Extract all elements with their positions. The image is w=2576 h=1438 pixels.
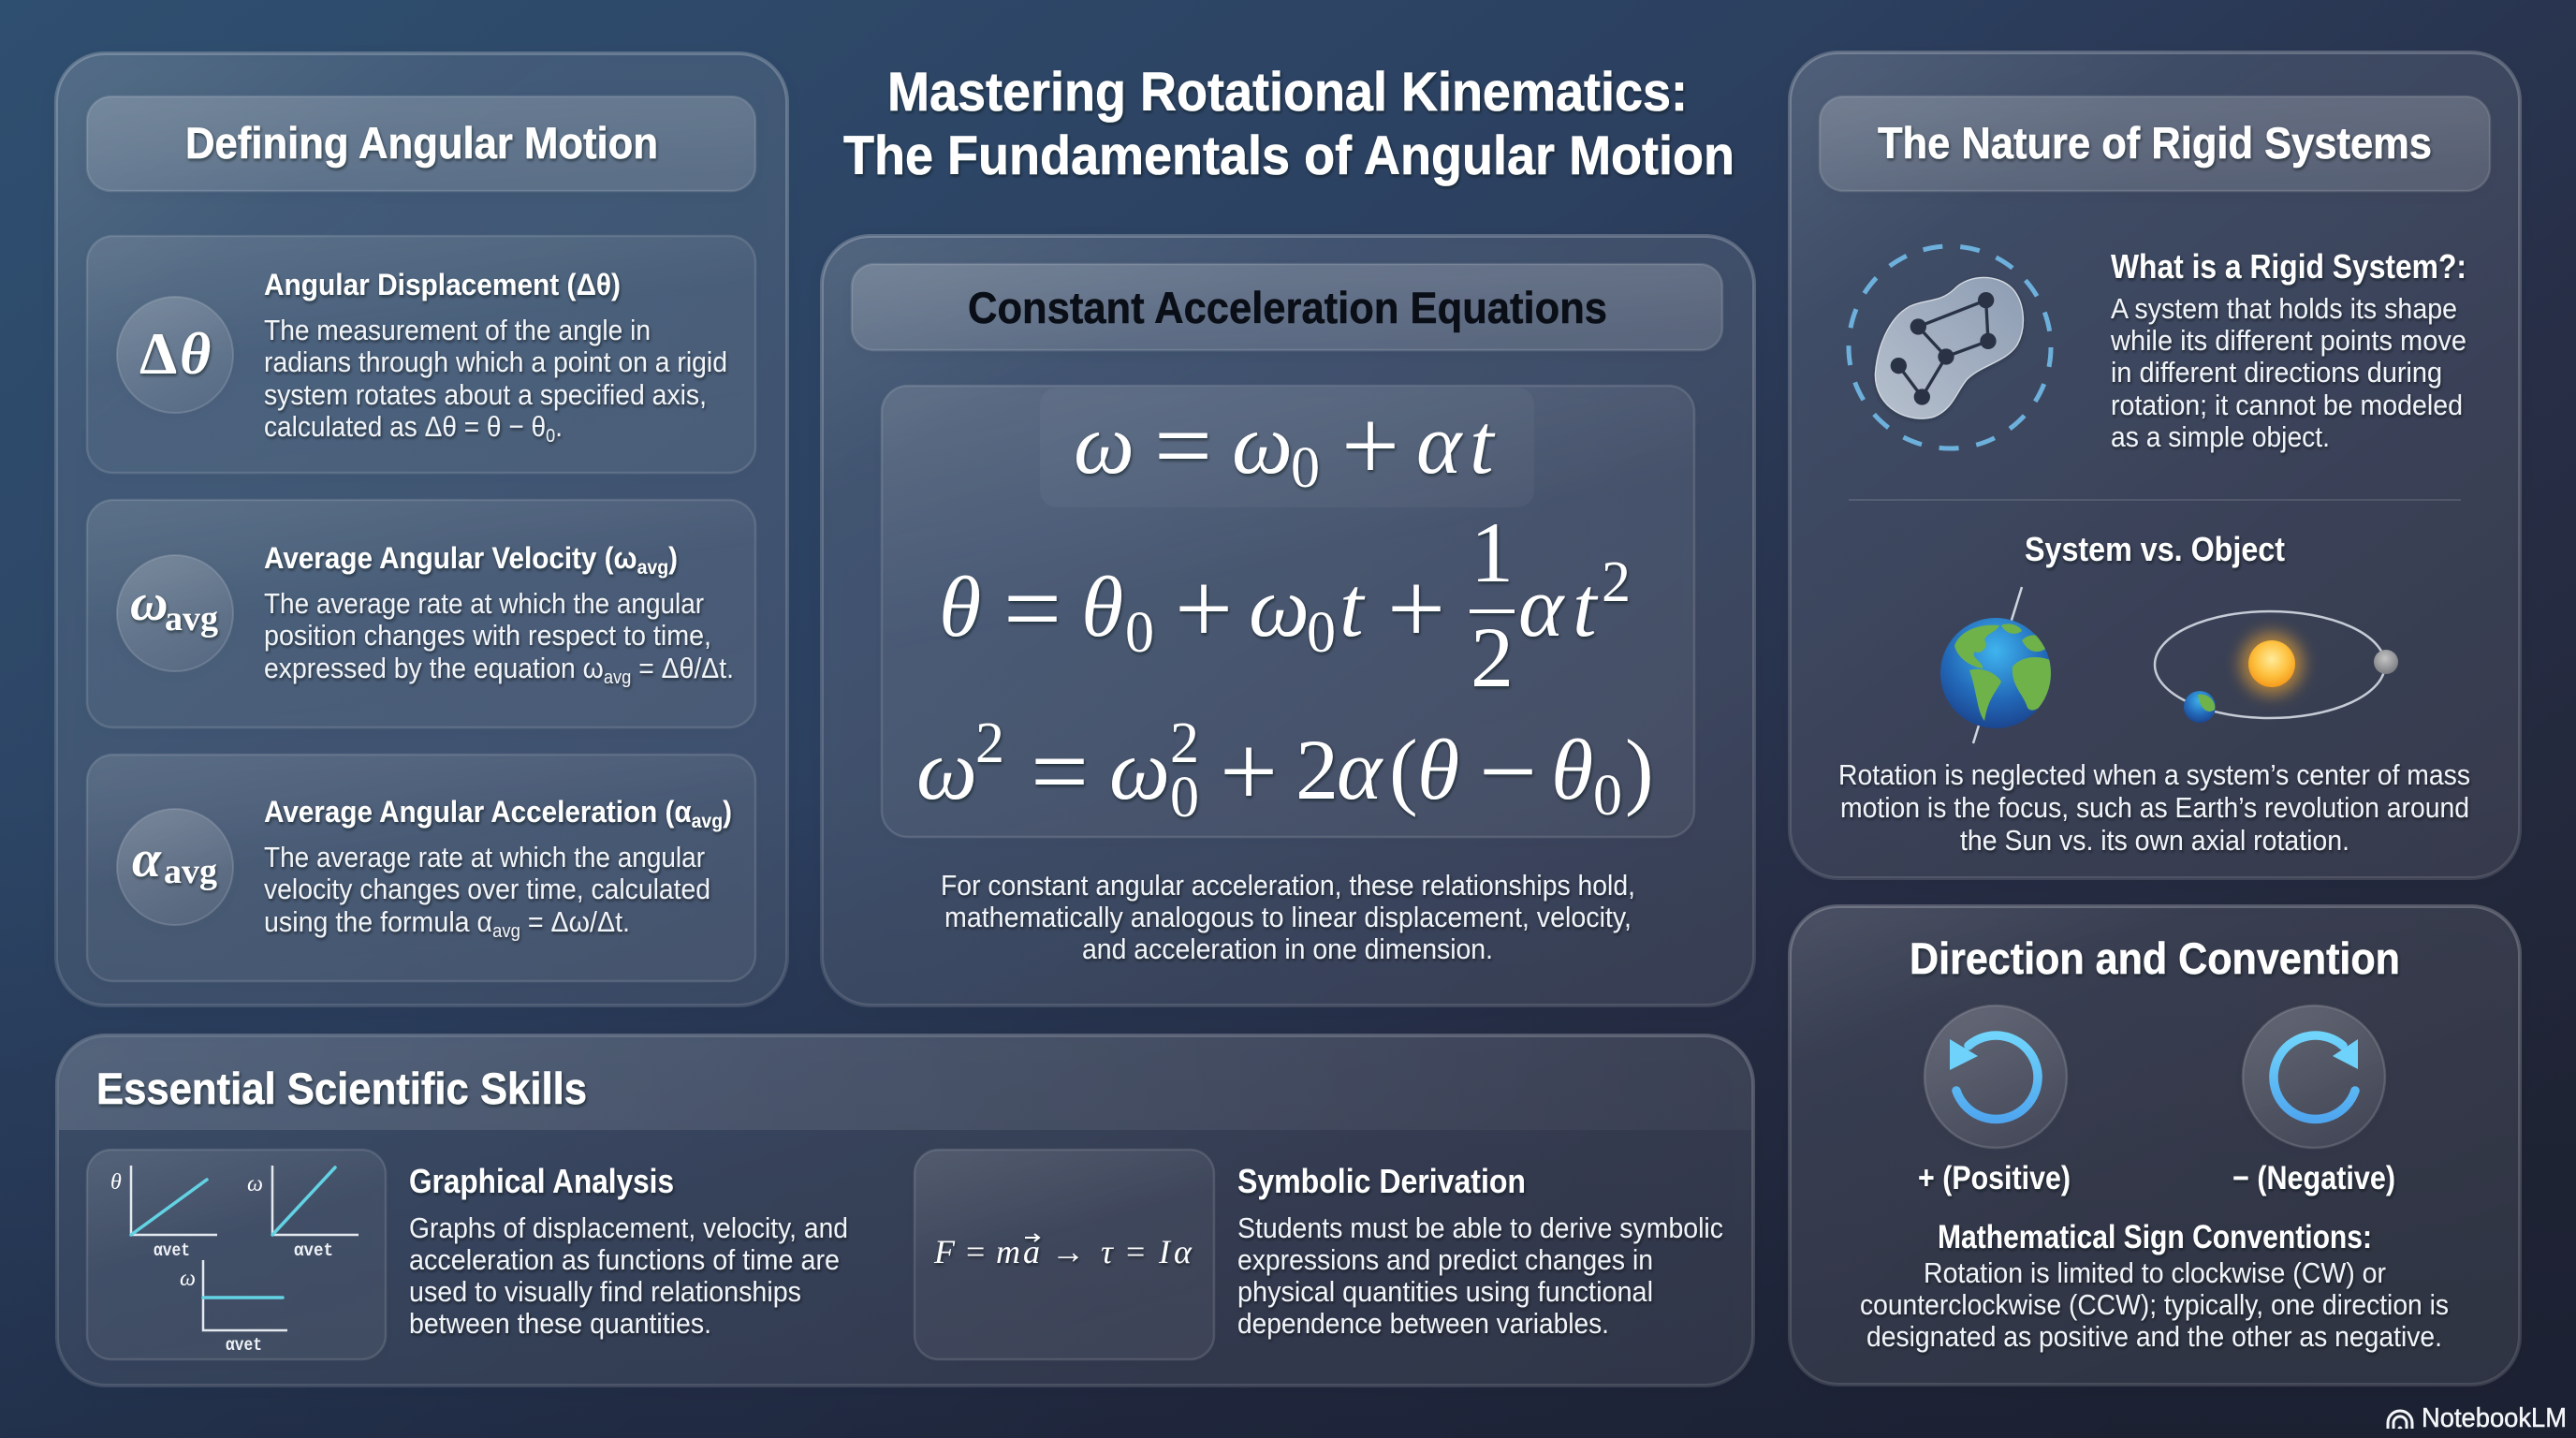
icon: omega avg — [117, 555, 233, 671]
icon: counterclockwise arrow — [1925, 1005, 2067, 1148]
heading: defining angular motion: Defining Angular Motion — [185, 118, 658, 168]
text: mathematical sign conventions: designated as positive and the other as negative. — [1866, 1320, 2442, 1353]
formula: force and torque: m — [996, 1233, 1020, 1270]
caption: system vs object: Rotation is neglected when a system’s center of mass — [1838, 758, 2470, 791]
title: Mastering Rotational Kinematics: — [887, 62, 1688, 123]
heading: defining angular motion — [87, 96, 755, 191]
panel: direction and convention — [1790, 906, 2520, 1385]
text: what is a rigid system: in different directions during — [2111, 356, 2442, 389]
text: angular displacement: system rotates about a specified axis, — [264, 378, 707, 411]
label: positive: + (Positive) — [1918, 1160, 2071, 1196]
icon: orbit with sun, earth and moon — [2155, 611, 2398, 723]
equation: angular velocity: + — [1341, 389, 1399, 503]
icon: delta theta: θ — [180, 320, 211, 387]
title: The Fundamentals of Angular Motion — [843, 125, 1734, 186]
caption: equations — [941, 869, 1635, 965]
label: negative: − (Negative) — [2232, 1160, 2395, 1196]
equation: velocity squared: = — [1031, 714, 1089, 829]
equation: angular position: 2 — [1471, 609, 1514, 705]
card: average angular velocity — [87, 500, 755, 727]
chart: theta vs time — [110, 1166, 217, 1261]
panel: nature of rigid systems — [1790, 52, 2520, 878]
text: mathematical sign conventions: Mathematical Sign Conventions: — [1938, 1219, 2372, 1255]
text: what is a rigid system: rotation; it cannot be modeled — [2111, 389, 2463, 421]
formula: force and torque: α — [1174, 1233, 1193, 1270]
icon: earth with axis — [1940, 587, 2054, 743]
subheading: system vs object: System vs. Object — [2025, 530, 2285, 568]
equation: velocity squared: ) — [1625, 722, 1654, 817]
panel: constant acceleration equations — [822, 236, 1754, 1005]
formula: force and torque: τ — [1101, 1233, 1114, 1270]
card: graphs — [87, 1150, 386, 1359]
icon: delta theta: Δ — [139, 320, 177, 387]
heading: direction and convention: Direction and Convention — [1910, 933, 2400, 983]
text: angular displacement: calculated as Δθ = θ − θ — [264, 410, 576, 443]
text: mathematical sign conventions: Rotation is limited to clockwise (CW) or — [1924, 1256, 2386, 1289]
logo: NotebookLM: NotebookLM — [2422, 1403, 2567, 1433]
icon: clockwise arrow — [2243, 1005, 2385, 1148]
text: average angular acceleration: The average rate at which the angular — [264, 841, 705, 873]
equation: angular position: + — [1175, 551, 1233, 666]
card: average angular acceleration — [87, 755, 755, 981]
text: angular displacement — [264, 268, 727, 447]
icon: delta theta — [117, 297, 233, 413]
equation: angular velocity: α — [1416, 396, 1463, 492]
equation: velocity squared: 0 — [1170, 766, 1199, 829]
equation: velocity squared: θ — [1417, 722, 1459, 817]
text: angular displacement: Angular Displacement (Δθ) — [264, 268, 621, 301]
icon: alpha avg: α — [132, 830, 162, 888]
text: symbolic derivation: Students must be able to derive symbolic — [1237, 1211, 1723, 1244]
equation: angular velocity — [1074, 389, 1496, 503]
text: average angular velocity: = Δθ/Δt. — [631, 652, 734, 684]
text: average angular velocity: The average rate at which the angular — [264, 587, 704, 620]
title — [843, 62, 1734, 186]
equation: angular velocity: = — [1154, 389, 1212, 503]
equation: angular position: θ — [939, 559, 981, 654]
formula: force and torque: → — [1051, 1233, 1085, 1270]
equation: velocity squared: 0 — [1593, 764, 1622, 828]
text: average angular acceleration: ) — [723, 795, 732, 829]
text: mathematical sign conventions: counterclockwise (CCW); typically, one direction is — [1860, 1288, 2449, 1321]
text: average angular velocity — [264, 541, 734, 688]
text: graphical analysis: Graphs of displacement, velocity, and — [409, 1211, 848, 1244]
text: average angular velocity: expressed by the equation ω — [264, 652, 635, 684]
text: average angular velocity: position changes with respect to time, — [264, 619, 711, 652]
text: average angular acceleration: Average Angular Acceleration (α — [264, 795, 725, 829]
caption: equations: and acceleration in one dimension. — [1082, 932, 1493, 965]
text: average angular acceleration — [264, 795, 732, 942]
equation: velocity squared — [916, 712, 1654, 829]
caption: system vs object: the Sun vs. its own axial rotation. — [1960, 824, 2349, 857]
equation box — [882, 386, 1694, 837]
equation: velocity squared: − — [1479, 714, 1537, 829]
formula: force and torque: I — [1158, 1233, 1172, 1270]
chart: alpha vs time: ω — [180, 1267, 196, 1291]
text: average angular acceleration: avg — [492, 921, 520, 942]
text: mathematical sign conventions — [1860, 1219, 2449, 1353]
equation: velocity squared: α — [1337, 722, 1383, 817]
heading: essential scientific skills: Essential Scientific Skills — [96, 1064, 587, 1113]
chart: omega vs time: αvet — [294, 1240, 333, 1261]
equation: angular position: t — [1339, 559, 1366, 654]
panel: essential scientific skills — [57, 1035, 1753, 1386]
panel: defining angular motion — [56, 53, 787, 1005]
text: symbolic derivation: dependence between variables. — [1237, 1307, 1609, 1340]
equation: angular position: 0 — [1125, 601, 1154, 665]
text: what is a rigid system: What is a Rigid System?: — [2111, 247, 2466, 286]
equation: angular position: 2 — [1602, 550, 1631, 614]
equation: angular position: θ — [1081, 559, 1123, 654]
chart: omega vs time: ω — [247, 1172, 263, 1196]
icon: rigid system — [1849, 246, 2051, 448]
formula: force and torque: = — [966, 1233, 985, 1270]
chart: theta vs time: θ — [110, 1170, 122, 1195]
chart: theta vs time: αvet — [154, 1240, 190, 1261]
icon: omega avg: avg — [165, 599, 218, 638]
text: what is a rigid system — [2110, 247, 2466, 453]
text: average angular velocity: ) — [668, 541, 678, 575]
text: average angular velocity: avg — [637, 557, 668, 579]
text: average angular acceleration: avg — [692, 811, 723, 832]
heading: constant acceleration equations — [852, 264, 1722, 350]
caption: system vs object — [1838, 758, 2470, 857]
equation: velocity squared: θ — [1551, 722, 1593, 817]
text: average angular velocity: Average Angular Velocity (ω — [264, 541, 666, 575]
chart: alpha vs time: αvet — [226, 1335, 262, 1356]
equation: angular position: ω — [1249, 559, 1310, 654]
icon: alpha avg — [117, 809, 233, 925]
text: symbolic derivation: Symbolic Derivation — [1237, 1162, 1526, 1200]
text: average angular velocity: avg — [604, 668, 631, 688]
card: angular displacement — [87, 236, 755, 473]
equation: angular position: α — [1518, 559, 1565, 654]
equation: angular position: = — [1003, 551, 1061, 666]
text: symbolic derivation: expressions and predict changes in — [1237, 1243, 1653, 1276]
equation: velocity squared: ( — [1389, 722, 1418, 817]
text: angular displacement: The measurement of the angle in — [264, 314, 651, 346]
text: average angular acceleration: = Δω/Δt. — [520, 905, 630, 938]
equation: angular position — [939, 505, 1631, 705]
text: graphical analysis: used to visually find relationships — [409, 1275, 801, 1308]
chart: omega vs time — [247, 1166, 359, 1261]
equation: angular position: t — [1573, 559, 1599, 654]
icon: omega avg: ω — [130, 574, 168, 632]
equation: velocity squared: ω — [1109, 722, 1170, 817]
heading: nature of rigid systems — [1820, 96, 2490, 191]
equation: velocity squared: ω — [916, 722, 977, 817]
text: symbolic derivation — [1237, 1162, 1723, 1340]
text: what is a rigid system: while its different points move — [2110, 324, 2466, 357]
text: graphical analysis — [409, 1162, 848, 1340]
equation: velocity squared: 2 — [1295, 722, 1339, 817]
caption: equations: mathematically analogous to linear displacement, velocity, — [944, 901, 1632, 933]
text: graphical analysis: between these quantities. — [409, 1307, 711, 1340]
equation: velocity squared: 2 — [1170, 712, 1199, 775]
equation: angular velocity: t — [1470, 396, 1496, 492]
text: average angular acceleration: velocity changes over time, calculated — [264, 873, 710, 905]
text: graphical analysis: Graphical Analysis — [409, 1162, 674, 1200]
text: symbolic derivation: physical quantities using functional — [1237, 1275, 1653, 1308]
equation: angular velocity: ω — [1232, 396, 1293, 492]
equation: velocity squared: + — [1220, 714, 1278, 829]
formula: force and torque — [933, 1233, 1193, 1270]
equation: velocity squared: 2 — [975, 712, 1004, 775]
equation: angular velocity: ω — [1074, 396, 1134, 492]
equation: angular position: 1 — [1471, 505, 1514, 600]
formula: force and torque: = — [1126, 1233, 1145, 1270]
text: angular displacement: radians through which a point on a rigid — [264, 345, 727, 378]
icon: alpha avg: avg — [164, 852, 217, 891]
heading: nature of rigid systems: The Nature of Rigid Systems — [1878, 118, 2432, 168]
text: average angular acceleration: using the formula α — [264, 905, 511, 938]
text: what is a rigid system: as a simple object. — [2111, 420, 2330, 453]
card: formula — [915, 1150, 1214, 1359]
equation: angular position: 0 — [1307, 601, 1336, 665]
formula: force and torque: F — [933, 1233, 956, 1270]
text: what is a rigid system: A system that holds its shape — [2111, 292, 2457, 325]
caption: system vs object: motion is the focus, such as Earth’s revolution around — [1840, 791, 2469, 824]
caption: equations: For constant angular acceleration, these relationships hold, — [941, 869, 1635, 902]
text: angular displacement: 0 — [546, 426, 555, 447]
equation: angular position: + — [1387, 551, 1445, 666]
text: angular displacement: . — [555, 410, 563, 443]
heading: constant acceleration equations: Constant Acceleration Equations — [968, 283, 1607, 332]
equation: angular velocity: 0 — [1291, 436, 1320, 500]
chart: alpha vs time — [180, 1260, 287, 1356]
text: graphical analysis: acceleration as functions of time are — [409, 1243, 840, 1276]
formula: force and torque: a — [1023, 1233, 1040, 1270]
